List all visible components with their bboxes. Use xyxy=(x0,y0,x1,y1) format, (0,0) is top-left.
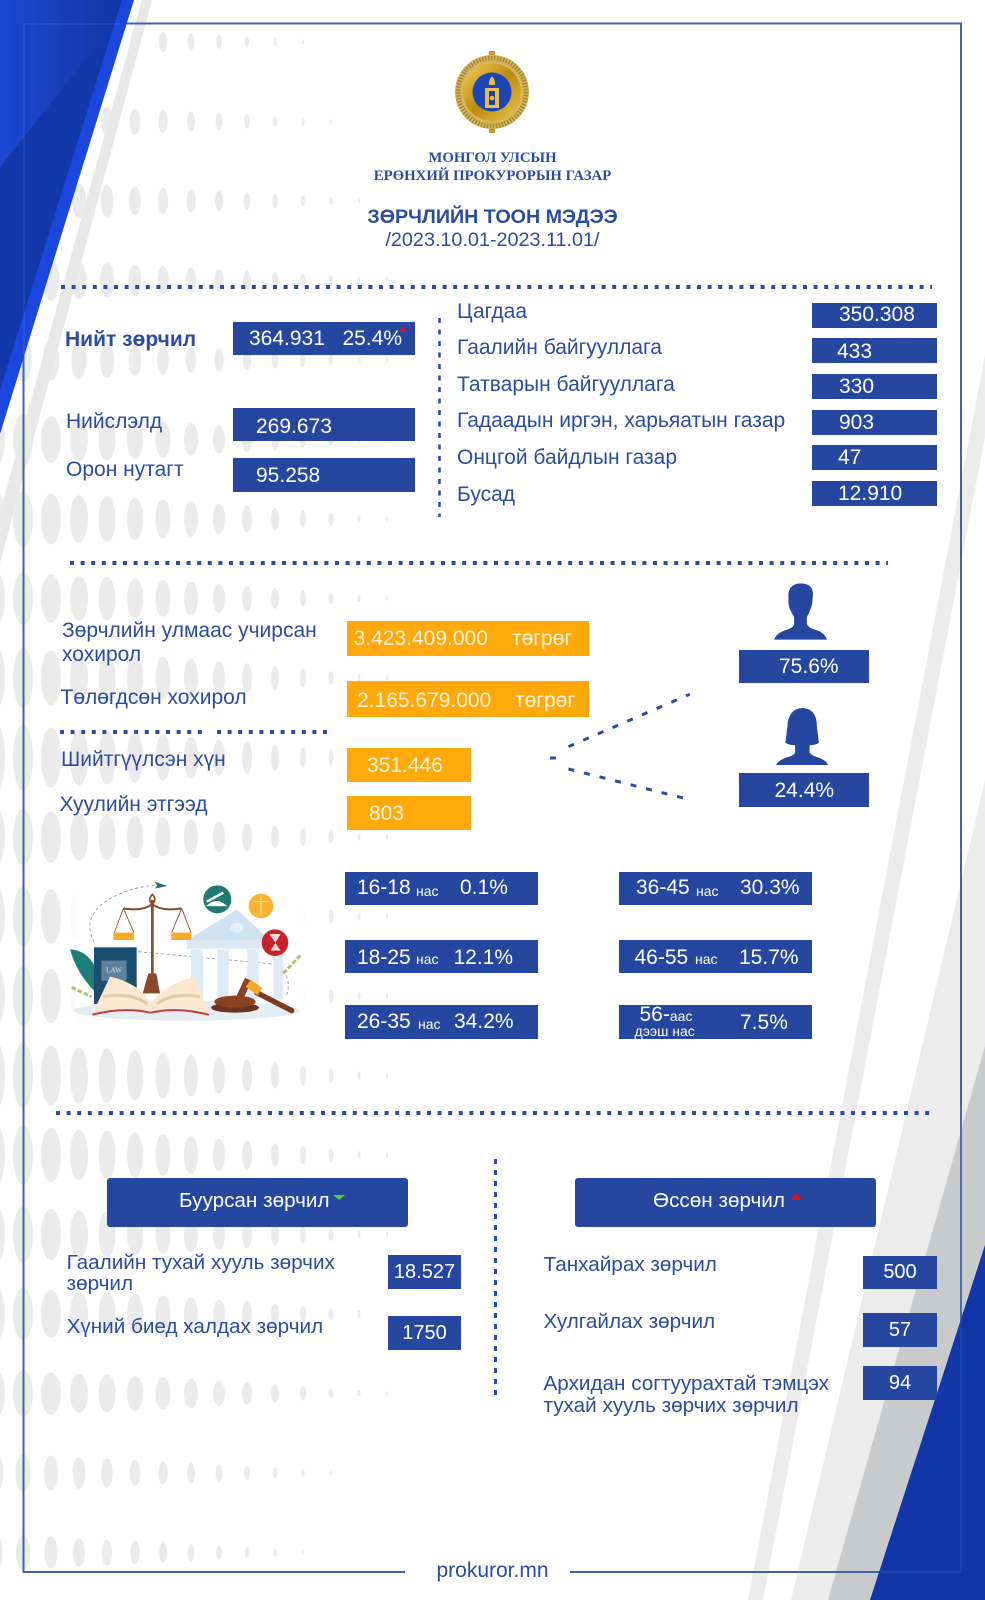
value: customs law offences xyxy=(388,1255,461,1289)
icon: male silhouette xyxy=(774,583,827,640)
value: rural: 95.258 xyxy=(256,464,320,487)
age 26-35: 34.2% xyxy=(454,1010,514,1033)
age 26-35: нас xyxy=(418,1016,441,1032)
label: customs law offences: зөрчил xyxy=(67,1272,133,1294)
value: capital: 269.673 xyxy=(256,414,332,438)
value: customs: 433 xyxy=(837,340,872,363)
label: alcohol law offences xyxy=(544,1372,829,1417)
age 46-55: 15.7% xyxy=(739,946,799,969)
value: police xyxy=(812,303,937,328)
label: rural: Орон нутагт xyxy=(66,458,184,481)
value: legal entities: 803 xyxy=(369,802,404,825)
age 18-25 xyxy=(345,940,538,973)
value: hooliganism: 500 xyxy=(883,1261,917,1283)
age 56 and older: 7.5% xyxy=(740,1011,788,1034)
age 16-18: нас xyxy=(416,883,439,899)
age 18-25: 12.1% xyxy=(454,946,513,969)
value: male share xyxy=(739,650,869,683)
value: bodily harm xyxy=(388,1316,461,1350)
value: tax xyxy=(812,374,937,399)
header xyxy=(367,51,618,251)
label: convicted people: Шийтгүүлсэн хүн xyxy=(61,748,226,771)
age 46-55 xyxy=(619,940,812,973)
panel: decreased and increased offences xyxy=(67,1159,937,1417)
value: convicted people xyxy=(347,748,471,782)
footer website: prokuror.mn xyxy=(436,1559,549,1582)
heading: decreased offences xyxy=(107,1178,408,1227)
icon: female silhouette xyxy=(776,708,828,765)
label: legal entities: Хуулийн этгээд xyxy=(60,793,207,816)
value: legal entities xyxy=(347,796,471,830)
age 46-55: нас xyxy=(695,951,718,967)
value: theft: 57 xyxy=(889,1318,911,1340)
date range: /2023.10.01-2023.11.01/ xyxy=(385,229,600,251)
value: damage paid: 2.165.679.000 xyxy=(357,689,491,712)
label: theft: Хулгайлах зөрчил xyxy=(544,1310,715,1333)
organisation name: ЕРӨНХИЙ ПРОКУРОРЫН ГАЗАР xyxy=(374,168,611,184)
value: total: 364.931 xyxy=(249,327,325,350)
age 26-35 xyxy=(345,1005,538,1039)
value: male share: 75.6% xyxy=(779,655,839,678)
heading: increased offences: Өссөн зөрчил xyxy=(653,1189,785,1212)
value: female share: 24.4% xyxy=(774,779,834,802)
label: customs law offences xyxy=(67,1250,335,1294)
age 46-55: 46-55 xyxy=(634,946,688,969)
label: customs law offences: Гаалийн тухай хууль зөрчих xyxy=(67,1250,335,1274)
value: hooliganism xyxy=(863,1256,937,1289)
age 36-45: 36-45 xyxy=(636,876,690,899)
value: tax: 330 xyxy=(839,375,874,398)
dashed branching lines xyxy=(550,692,690,800)
age 56 and older: дээш нас xyxy=(634,1023,695,1039)
value: customs law offences: 18.527 xyxy=(394,1260,455,1282)
short divider xyxy=(60,730,327,734)
title: ЗӨРЧЛИЙН ТООН МЭДЭЭ xyxy=(367,206,618,228)
value: emergency xyxy=(812,445,937,470)
value: damage paid xyxy=(347,681,589,717)
organisation name xyxy=(374,150,611,184)
value: damage caused xyxy=(347,621,589,656)
age 56 and older: 56-аас xyxy=(640,1003,692,1026)
value: immigration: 903 xyxy=(839,411,874,434)
label: hooliganism: Танхайрах зөрчил xyxy=(544,1253,717,1276)
label: bodily harm: Хүний биед халдах зөрчил xyxy=(67,1315,323,1338)
age 16-18 xyxy=(345,872,538,905)
label: damage caused xyxy=(62,619,317,666)
label: alcohol law offences: тухай хууль зөрчих зөрчил xyxy=(544,1394,799,1417)
value: female share xyxy=(739,773,869,807)
value: damage caused: 3.423.409.000 xyxy=(354,627,488,650)
value: theft xyxy=(863,1313,937,1347)
age 16-18: 0.1% xyxy=(460,876,508,899)
value: damage caused: төгрөг xyxy=(512,627,572,650)
label: customs: Гаалийн байгууллага xyxy=(457,336,662,359)
label: police: Цагдаа xyxy=(457,300,527,323)
value: damage paid: төгрөг xyxy=(515,689,575,712)
age 56 and older xyxy=(619,1005,812,1039)
value: total: 25.4% xyxy=(342,327,402,350)
illustration: scales of justice, law book, courthouse and gavel xyxy=(70,882,302,1020)
value: emergency: 47 xyxy=(838,446,861,469)
label: alcohol law offences: Архидан согтуурахтай тэмцэх xyxy=(544,1372,829,1395)
age 26-35: 26-35 xyxy=(357,1010,411,1033)
panel: age groups xyxy=(70,872,812,1039)
label: emergency: Онцгой байдлын газар xyxy=(457,446,677,469)
value: rural xyxy=(233,458,415,492)
divider 1 xyxy=(61,285,932,289)
label: total: Нийт зөрчил xyxy=(65,328,196,351)
heading: increased offences xyxy=(575,1178,876,1227)
value: bodily harm: 1750 xyxy=(402,1322,447,1344)
age 18-25: 18-25 xyxy=(357,946,411,969)
age 36-45: нас xyxy=(696,883,719,899)
value: police: 350.308 xyxy=(839,303,915,326)
label: other: Бусад xyxy=(457,483,515,506)
label: damage caused: Зөрчлийн улмаас учирсан xyxy=(62,619,317,642)
age 16-18: 16-18 xyxy=(357,876,411,899)
label: damage caused: хохирол xyxy=(62,643,141,666)
value: other: 12.910 xyxy=(838,482,902,505)
age 36-45: 30.3% xyxy=(740,876,800,899)
organisation name: МОНГОЛ УЛСЫН xyxy=(428,150,557,166)
value: alcohol law offences xyxy=(863,1366,937,1400)
label: damage paid: Төлөгдсөн хохирол xyxy=(60,686,247,709)
vertical divider xyxy=(438,318,441,517)
vertical divider xyxy=(494,1159,497,1395)
panel: damages and convicted people xyxy=(60,583,869,830)
label: capital: Нийслэлд xyxy=(66,410,162,433)
label: tax: Татварын байгууллага xyxy=(457,373,675,396)
age 18-25: нас xyxy=(416,951,439,967)
value: capital xyxy=(233,408,415,441)
illustration: scales of justice, law book, courthouse and gavel: LAW xyxy=(106,966,122,975)
heading: decreased offences: Буурсан зөрчил xyxy=(179,1189,330,1212)
icon: prosecutor emblem xyxy=(455,51,529,133)
age 36-45 xyxy=(619,872,812,905)
divider 2 xyxy=(70,561,888,565)
value: customs xyxy=(812,338,937,363)
value: alcohol law offences: 94 xyxy=(889,1372,911,1394)
divider 3 xyxy=(56,1111,930,1115)
value: total xyxy=(233,322,415,355)
panel: total offences by region and agency xyxy=(65,300,937,517)
label: immigration: Гадаадын иргэн, харьяатын газар xyxy=(457,409,785,432)
value: other xyxy=(812,481,937,506)
value: immigration xyxy=(812,410,937,435)
value: convicted people: 351.446 xyxy=(367,754,443,776)
